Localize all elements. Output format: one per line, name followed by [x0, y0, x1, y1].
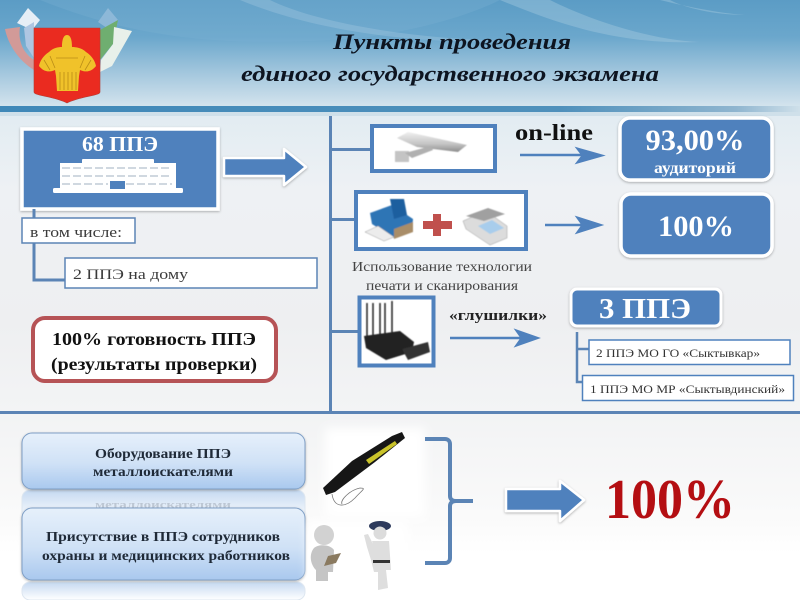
panel: 93,00% аудиторий: 93,00%	[646, 124, 744, 157]
icon: school building	[53, 159, 183, 193]
text box: 2 ППЭ на дому	[65, 258, 317, 288]
icon: flags and coat of arms	[5, 8, 132, 103]
title: Пункты проведения	[332, 29, 571, 54]
label: on-line: on-line	[515, 120, 593, 145]
icon: metal detector	[323, 428, 425, 518]
icon: police figure	[364, 521, 391, 590]
text: printing and scanning technology: печати и сканирования	[366, 278, 518, 293]
icon: camera box	[372, 126, 495, 171]
reflection: metal detector card	[22, 490, 305, 520]
panel: 68 ППЭ: 68 ППЭ	[82, 132, 158, 156]
label: глушилки: «глушилки»	[449, 308, 547, 324]
reflection: staff card	[22, 582, 305, 600]
reflection: metal detector card: металлоискателями	[95, 499, 232, 511]
card: security and medical staff	[22, 508, 305, 580]
icon: printer and scanner box	[356, 192, 526, 249]
text box: 2 ППЭ на дому: 2 ППЭ на дому	[73, 267, 189, 283]
icon: jammer	[364, 301, 430, 360]
text box: Сыктывкар: 2 ППЭ МО ГО «Сыктывкар»	[596, 346, 760, 360]
title	[241, 29, 659, 86]
arrow: to 100%	[506, 481, 584, 521]
card: metal detectors: металлоискателями	[93, 464, 233, 479]
text: printing and scanning technology	[352, 259, 532, 293]
main panel background	[0, 116, 800, 412]
card: metal detectors: Оборудование ППЭ	[95, 446, 231, 461]
panel: 3 ППЭ	[571, 289, 721, 326]
panel: 3 ППЭ: 3 ППЭ	[599, 294, 691, 325]
panel: 68 ППЭ	[22, 129, 218, 209]
callout: 100% готовность	[33, 318, 276, 381]
panel frame lines	[0, 116, 800, 414]
text box: в том числе	[22, 218, 135, 243]
icon: staff figure with clipboard	[308, 522, 408, 584]
icon: plus	[423, 214, 452, 236]
card: metal detectors	[22, 433, 305, 489]
text box: Сыктывкар	[589, 340, 790, 364]
header background	[0, 0, 800, 116]
arrow: camera to 93%	[520, 149, 601, 162]
panel: 93,00% аудиторий	[620, 118, 772, 180]
panel: 100%: 100%	[658, 210, 734, 243]
text box: в том числе: в том числе:	[30, 225, 122, 241]
panel: 93,00% аудиторий: аудиторий	[654, 160, 736, 177]
callout: 100% готовность: (результаты проверки)	[51, 354, 257, 374]
emblem: golden bird	[39, 35, 96, 91]
card: security and medical staff: охраны и медицинских работников	[42, 549, 290, 564]
callout: 100% готовность: 100% готовность ППЭ	[52, 329, 256, 349]
title: единого государственного экзамена	[241, 61, 659, 86]
text box: Сыктывдинский: 1 ППЭ МО МР «Сыктывдинский»	[590, 382, 785, 396]
big 100%: 100%	[605, 469, 735, 531]
arrow: from 68 ППЭ	[224, 149, 306, 185]
connector: 68 ППЭ tree	[34, 209, 66, 280]
bottom background	[0, 414, 800, 600]
icon: jammer box	[360, 298, 434, 366]
card: security and medical staff: Присутствие в ППЭ сотрудников	[46, 530, 280, 545]
text box: Сыктывдинский	[582, 376, 794, 400]
icon: scanner	[463, 208, 507, 245]
bracket	[425, 439, 473, 563]
icon: camera	[395, 132, 467, 162]
arrow: printer to 100%	[545, 218, 600, 232]
text: printing and scanning technology: Использование технологии	[352, 259, 532, 274]
icon: printer	[365, 199, 413, 241]
connector: 3 ППЭ tree	[577, 332, 589, 382]
panel: 100%	[621, 194, 772, 256]
arrow: jammer to 3 ППЭ	[450, 331, 537, 345]
